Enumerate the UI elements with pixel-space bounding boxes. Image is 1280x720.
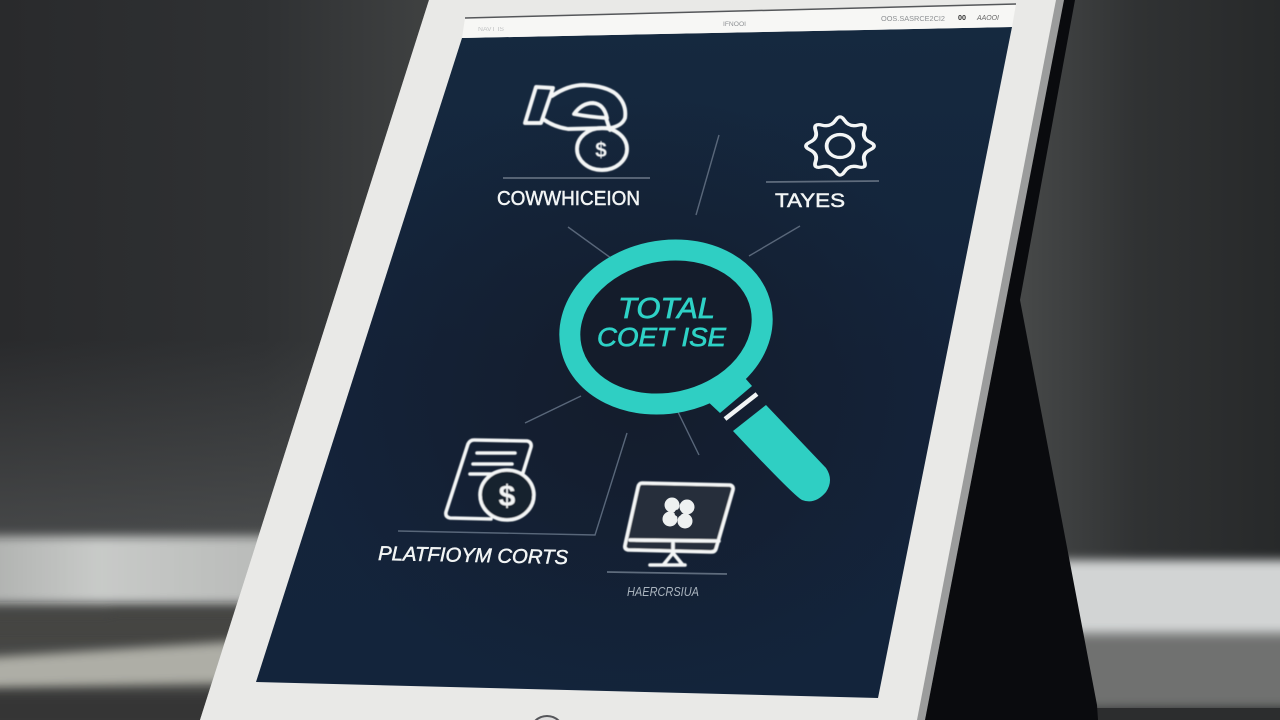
panel: marketplace xyxy=(607,483,733,599)
status bar text xyxy=(478,15,999,33)
divider xyxy=(503,177,650,179)
screen xyxy=(256,27,1012,698)
label: taxes: TAYES xyxy=(775,191,845,212)
divider xyxy=(607,572,727,574)
divider xyxy=(766,181,879,182)
center label xyxy=(597,293,727,352)
status bar text: AAOOI xyxy=(976,15,999,22)
center label: TOTAL xyxy=(618,293,715,325)
top status bar xyxy=(462,4,1016,38)
handle neck xyxy=(704,370,752,413)
status bar text: OOS.SASRCE2CI2 xyxy=(881,16,945,23)
panel: platform costs xyxy=(378,440,569,569)
icon: monitor xyxy=(625,483,733,565)
icon: gear xyxy=(806,117,874,175)
status bar text: NAVT IS xyxy=(478,27,504,33)
label: marketplace: HAERCRSIUA xyxy=(627,585,699,599)
handle stripe xyxy=(725,394,757,419)
handle xyxy=(733,405,830,501)
icon: hand with coin: $ xyxy=(595,139,607,162)
status bar text: IFNOOI xyxy=(723,22,746,28)
home button xyxy=(530,716,564,720)
connector lines xyxy=(398,135,800,535)
label: commission: COWWHICEION xyxy=(497,188,640,210)
center label: COET ISE xyxy=(597,322,727,352)
label: platform costs: PLATFIOYM CORTS xyxy=(378,543,569,569)
panel: taxes xyxy=(766,117,879,212)
icon: hand with coin xyxy=(525,85,627,170)
icon: document with dollar coin: $ xyxy=(499,480,516,513)
tablet body xyxy=(200,0,1064,720)
lens ring xyxy=(555,232,777,422)
magnifying glass xyxy=(555,232,830,501)
tablet stand xyxy=(925,0,1098,720)
panel: commission xyxy=(497,85,650,210)
icon: document with dollar coin xyxy=(446,440,534,520)
status bar text: 00 xyxy=(958,15,966,22)
icon: monitor emblem xyxy=(662,498,694,528)
